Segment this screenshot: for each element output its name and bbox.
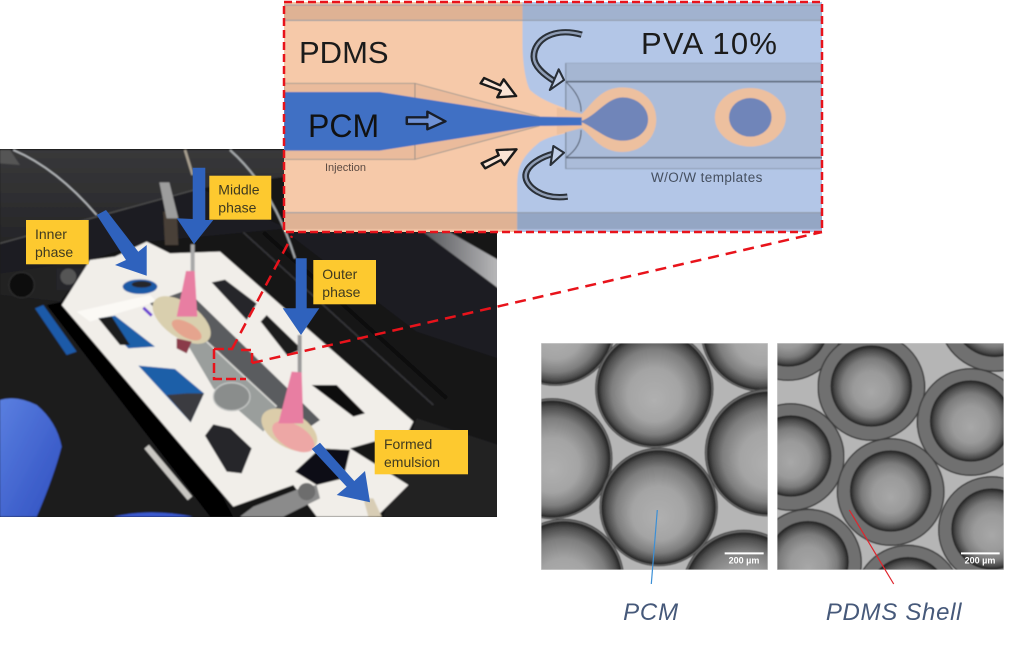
label: injection: Injection — [325, 162, 366, 174]
collection channel — [566, 63, 835, 169]
callout: middle phase: phase — [218, 200, 257, 216]
pointer: PCM core — [651, 510, 657, 584]
label: W/O/W templates: W/O/W templates — [651, 170, 763, 185]
caption: PDMS Shell: PDMS Shell — [826, 599, 962, 626]
small red dashed target box — [214, 349, 252, 379]
scale bar — [725, 553, 764, 566]
pointer: PDMS shell — [849, 510, 894, 584]
arrow: inner phase — [97, 210, 147, 276]
arrow: formed emulsion — [312, 443, 370, 502]
arrow: middle phase — [177, 168, 213, 244]
forming droplet — [557, 87, 656, 152]
dashed zoom line to schematic corner — [252, 232, 822, 363]
callout: formed emulsion: emulsion — [384, 454, 440, 470]
curved flow arrows — [534, 32, 582, 82]
callout: inner phase: Inner — [35, 226, 67, 242]
dashed zoom line to chip — [232, 236, 292, 349]
callout: outer phase: phase — [322, 284, 361, 300]
PCM stream — [284, 92, 582, 151]
needles — [191, 244, 195, 273]
label: PVA 10%: PVA 10% — [641, 26, 778, 61]
clamp screw — [240, 485, 320, 517]
panel: PCM droplets micrograph — [491, 265, 833, 646]
glass chip — [150, 290, 320, 445]
released droplet — [715, 88, 786, 147]
callout: formed emulsion: Formed — [384, 436, 432, 452]
panel: PDMS shell micrograph — [735, 259, 1024, 646]
callout: inner phase — [26, 220, 89, 264]
callout: outer phase: Outer — [322, 266, 358, 282]
label: PDMS: PDMS — [299, 35, 389, 70]
windows — [98, 316, 155, 348]
schematic dashed outline — [284, 2, 822, 232]
pink hubs — [177, 271, 197, 317]
glove — [0, 398, 62, 517]
panel: flow-focusing schematic — [280, 0, 835, 240]
scale bar — [961, 553, 1000, 566]
callout: formed emulsion — [375, 430, 468, 474]
callout: outer phase — [313, 260, 376, 304]
glue pads — [144, 287, 219, 353]
scale bar: 200 µm — [729, 556, 759, 566]
callout: middle phase: Middle — [218, 182, 260, 198]
callout: inner phase: phase — [35, 244, 73, 260]
label: PCM in needle: PCM — [308, 108, 379, 144]
small flow arrows — [407, 112, 445, 129]
arrow: outer phase — [283, 258, 319, 335]
scale bar: 200 µm — [965, 556, 995, 566]
panel: microfluidic device photo — [0, 145, 503, 522]
caption: PCM: PCM — [623, 599, 679, 626]
white holder frame — [62, 242, 413, 517]
callout: middle phase — [209, 176, 271, 220]
blue outer phase region — [517, 0, 834, 240]
capillary — [284, 83, 539, 159]
